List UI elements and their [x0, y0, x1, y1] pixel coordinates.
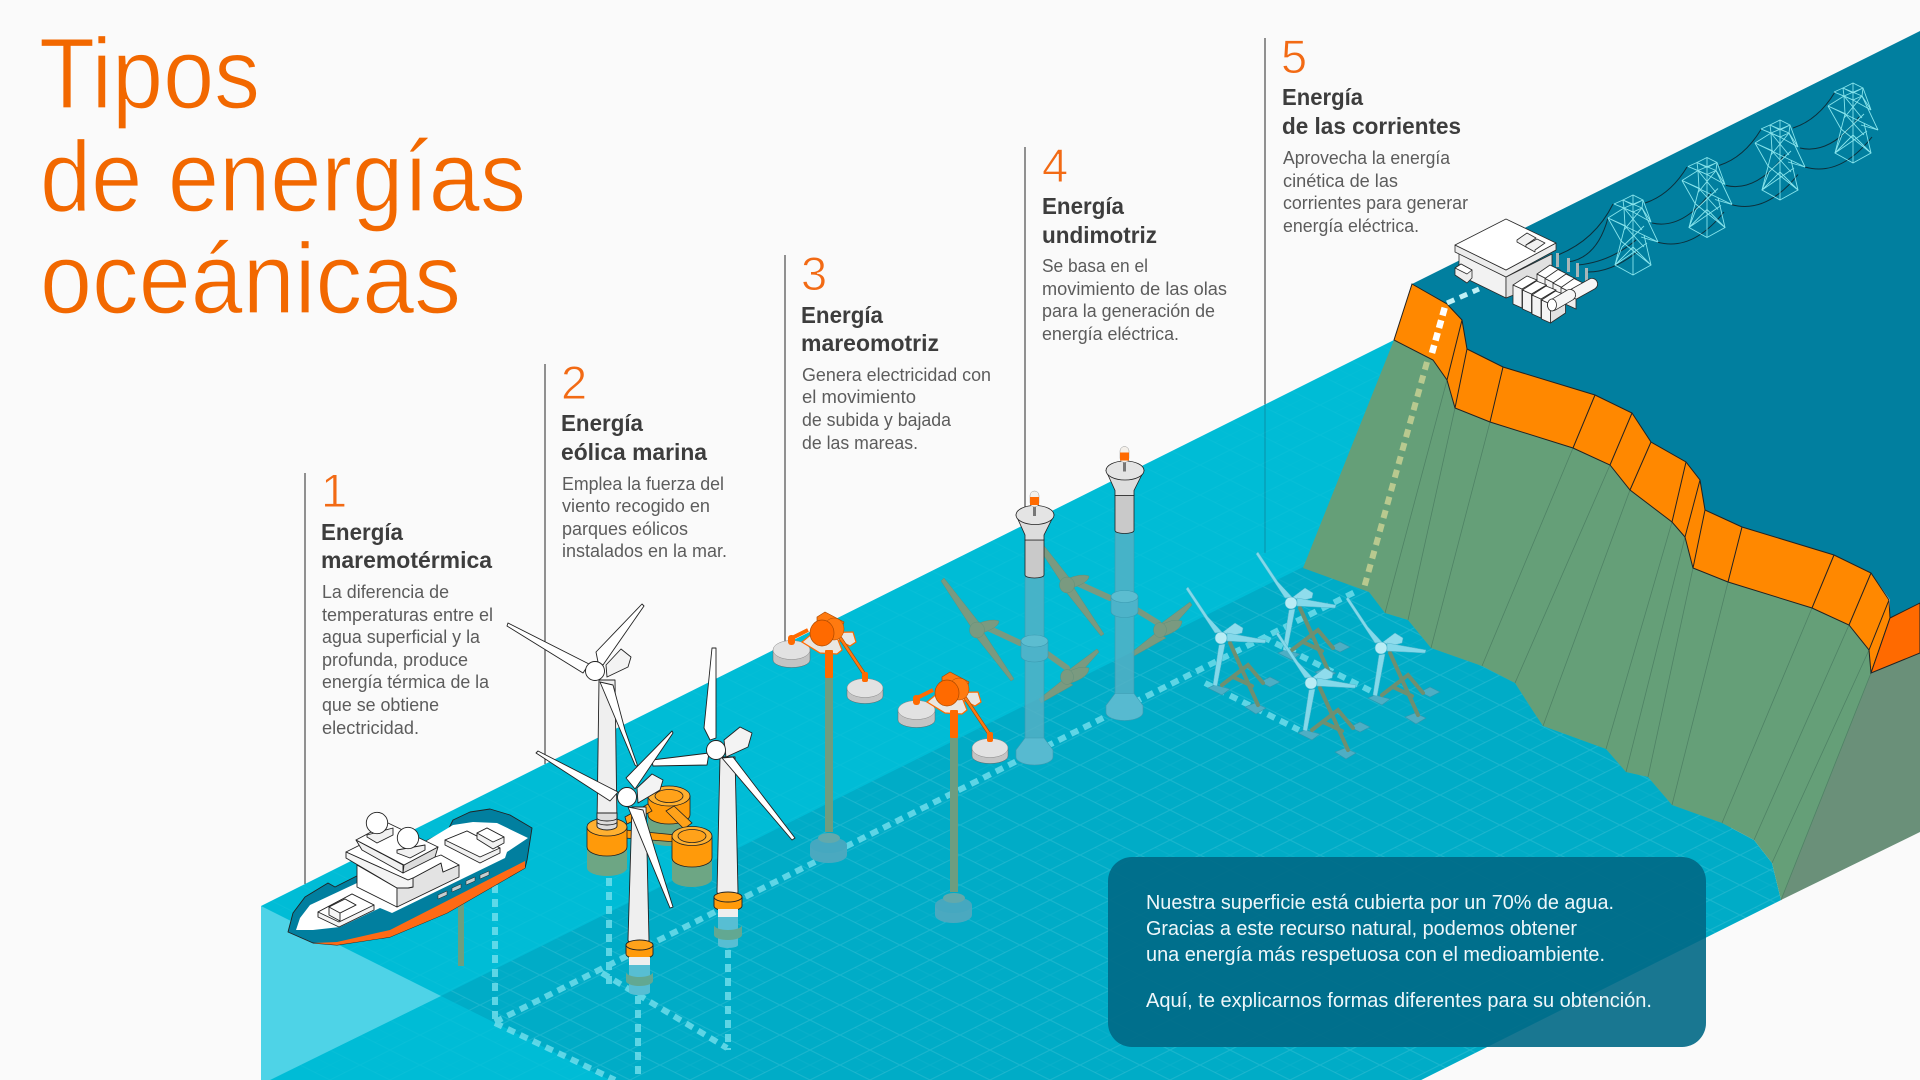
column 1: maremotermica: que se obtiene: [322, 695, 439, 715]
column 3: mareomotriz: [801, 247, 991, 453]
column 4: undimotriz: [1042, 139, 1227, 344]
column 2: eolica marina: eólica marina: [561, 439, 707, 465]
cliff: [1303, 284, 1920, 900]
wind turbine back: [507, 604, 644, 830]
submerged bases: [587, 850, 627, 876]
offshore wind platform: [587, 786, 712, 887]
column 4: undimotriz: para la generación de: [1042, 301, 1215, 321]
column 2: eolica marina: Energía: [561, 410, 643, 436]
info callout: Aquí, te explicarnos formas diferentes para su obtención.: [1146, 989, 1652, 1012]
column 5: corrientes: cinética de las: [1283, 171, 1398, 191]
cliff green wall: [1303, 340, 1871, 900]
ship: [288, 809, 532, 966]
tidal machines: [773, 612, 1008, 923]
floats and struts: [648, 796, 690, 824]
column 2: eolica marina: instalados en la mar.: [562, 541, 727, 561]
cliff cable: [1432, 303, 1446, 353]
wave energy columns: [1016, 446, 1144, 765]
orange band: [1394, 284, 1890, 673]
column 5: corrientes: [1281, 30, 1468, 236]
electric pylons: [1558, 83, 1878, 275]
title: oceánicas: [40, 223, 461, 335]
column 4: undimotriz: movimiento de las olas: [1042, 279, 1227, 299]
land: upper plateau: [1412, 31, 1920, 618]
column 3: mareomotriz: mareomotriz: [801, 330, 939, 356]
column guide lines: [305, 38, 1265, 884]
light water front face: [261, 906, 441, 1080]
column 5: corrientes: Aprovecha la energía: [1283, 148, 1451, 168]
wave energy rotors: [941, 533, 1192, 703]
title: Tipos: [39, 18, 260, 130]
seabed: [400, 540, 1800, 1080]
cliff end face: [1781, 653, 1920, 900]
column 1: maremotermica: Energía: [321, 519, 403, 545]
column 2: eolica marina: Emplea la fuerza del: [562, 474, 724, 494]
column 2: eolica marina: [561, 356, 727, 561]
sea surface grid: [261, 340, 1781, 1080]
column 3: mareomotriz: el movimiento: [802, 387, 916, 407]
column 1: maremotermica: maremotérmica: [321, 547, 492, 573]
seabed cable dashes: [495, 591, 1375, 1080]
column 4: undimotriz: undimotriz: [1042, 222, 1157, 248]
wind turbine right: [652, 648, 795, 948]
power plant: [1455, 219, 1592, 323]
column 2: eolica marina: parques eólicos: [562, 519, 688, 539]
column 2: eolica marina: 2: [561, 356, 587, 409]
column 5: corrientes: Energía: [1282, 84, 1363, 110]
column 1: maremotermica: temperaturas entre el: [322, 605, 493, 625]
info callout: Nuestra superficie está cubierta por un 70% de agua.: [1146, 891, 1614, 914]
column 5: corrientes: energía eléctrica.: [1283, 216, 1419, 236]
current turbines: [1186, 552, 1440, 759]
info callout: [1108, 857, 1706, 1047]
column 3: mareomotriz: Energía: [801, 302, 883, 328]
column 3: mareomotriz: de subida y bajada: [802, 410, 952, 430]
column 4: undimotriz: Se basa en el: [1042, 256, 1148, 276]
column 1: maremotermica: agua superficial y la: [322, 627, 481, 647]
column 5: corrientes: de las corrientes: [1282, 113, 1461, 139]
column 1: maremotermica: profunda, produce: [322, 650, 468, 670]
ocean scene: [261, 340, 1800, 1080]
column 3: mareomotriz: 3: [801, 247, 827, 300]
column 1: maremotermica: [321, 464, 493, 738]
column 2: eolica marina: viento recogido en: [562, 496, 710, 516]
column 1: maremotermica: 1: [321, 464, 347, 517]
column 4: undimotriz: energía eléctrica.: [1042, 324, 1179, 344]
title: de energías: [40, 121, 526, 233]
column 1: maremotermica: La diferencia de: [322, 582, 449, 602]
column 1: maremotermica: energía térmica de la: [322, 672, 490, 692]
column 5: corrientes: corrientes para generar: [1283, 193, 1468, 213]
info callout: una energía más respetuosa con el medioambiente.: [1146, 943, 1605, 966]
column 3: mareomotriz: de las mareas.: [802, 433, 918, 453]
column 3: mareomotriz: Genera electricidad con: [802, 365, 991, 385]
orange end face: [1871, 603, 1920, 673]
title: [39, 18, 526, 335]
column 5: corrientes: 5: [1281, 30, 1307, 83]
info callout: Gracias a este recurso natural, podemos obtener: [1146, 917, 1577, 940]
column 1: maremotermica: electricidad.: [322, 718, 419, 738]
column 4: undimotriz: 4: [1042, 139, 1068, 192]
sea water: [261, 340, 1781, 1080]
column 4: undimotriz: Energía: [1042, 193, 1124, 219]
wind turbine front: [536, 731, 673, 995]
